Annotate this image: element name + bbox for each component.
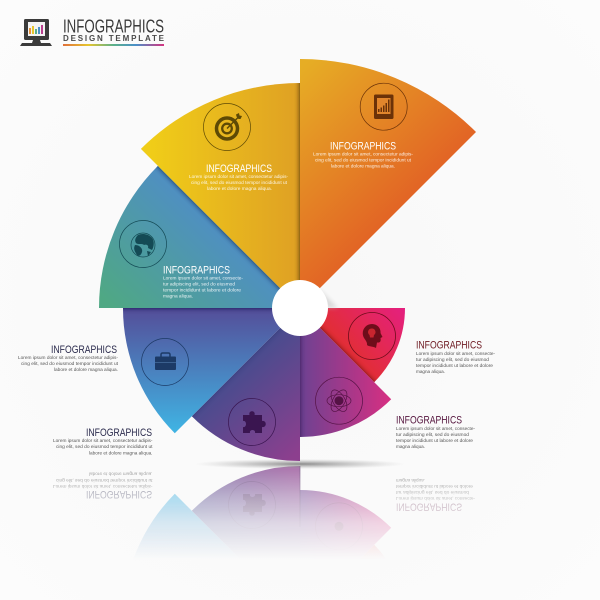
text block: teal: [163, 264, 243, 300]
subtitle: DESIGN TEMPLATE: [63, 34, 165, 43]
text block: red: magna aliqua.: [416, 369, 445, 375]
text block: blue: Lorem ipsum dolor sit amet, consectetur adipis-: [18, 355, 118, 361]
reflection: tur adipiscing elit, sed do eiusmod: [396, 489, 469, 495]
text block: violet: Lorem ipsum dolor sit amet, consectetur adipis-: [53, 438, 153, 444]
panel: orange tablet segment: [300, 59, 476, 308]
icon: tablet with bars: [360, 83, 407, 130]
reflection: tempor incididunt ut labore et dolore: [396, 483, 473, 489]
icon: atom: [316, 377, 362, 424]
icon: target: [204, 104, 250, 150]
icon: globe: [120, 220, 166, 268]
text block: magenta: Lorem ipsum dolor sit amet, consecte-: [396, 426, 475, 432]
text block: red: tur adipiscing elit, sed do eiusmod: [416, 357, 489, 363]
icon: head with lightbulb: [348, 312, 396, 360]
text block: orange: Lorem ipsum dolor sit amet, consectetur adipis-: [313, 152, 413, 158]
text block: blue: INFOGRAPHICS: [51, 344, 117, 356]
text block: magenta: [396, 414, 475, 450]
panel: blue briefcase segment: [18, 308, 280, 434]
icon: briefcase: [142, 338, 188, 386]
text block: teal: magna aliqua.: [163, 294, 193, 300]
text block: teal: INFOGRAPHICS: [163, 264, 230, 276]
text block: orange: [313, 140, 413, 170]
text block: magenta: magna aliqua.: [396, 444, 425, 450]
text block: violet: [53, 427, 153, 456]
text block: red: Lorem ipsum dolor sit amet, consecte-: [416, 351, 495, 357]
text block: red: tempor incididunt ut labore et dolore: [416, 363, 493, 369]
text block: red: [416, 340, 495, 375]
panel: yellow target segment: [141, 83, 300, 288]
text block: teal: Lorem ipsum dolor sit amet, consecte-: [163, 276, 243, 282]
text block: magenta: tur adipiscing elit, sed do eiusmod: [396, 432, 469, 438]
text block: yellow: INFOGRAPHICS: [206, 163, 272, 175]
text block: blue: cing elit, sed do eiusmod tempor incididunt ut: [21, 361, 119, 367]
text block: violet: cing elit, sed do eiusmod tempor incididunt ut: [56, 444, 153, 450]
text block: teal: tur adipiscing elit, sed do eiusmod: [163, 282, 235, 288]
text block: red: INFOGRAPHICS: [416, 340, 482, 352]
reflection: INFOGRAPHICS: [86, 488, 152, 500]
ground shadow: [195, 459, 405, 469]
reflection: cing elit, sed do eiusmod tempor incididunt ut: [56, 477, 153, 483]
rainbow rule: [63, 44, 164, 46]
text block: violet: INFOGRAPHICS: [86, 427, 152, 439]
text block: yellow: [189, 163, 288, 192]
text block: blue: [18, 344, 119, 373]
text block: yellow: cing elit, sed do eiusmod tempor incididunt ut: [191, 180, 288, 186]
text block: yellow: labore et dolore magna aliqua.: [207, 186, 272, 192]
reflection: Lorem ipsum dolor sit amet, consectetur adipis-: [53, 483, 153, 489]
text block: orange: INFOGRAPHICS: [330, 140, 396, 152]
text block: orange: labore et dolore magna aliqua.: [331, 164, 395, 170]
title: INFOGRAPHICS: [63, 16, 164, 36]
text block: yellow: Lorem ipsum dolor sit amet, consectetur adipis-: [189, 174, 288, 180]
reflection: labore et dolore magna aliqua.: [89, 471, 152, 477]
panel: violet puzzle segment: [53, 328, 300, 461]
panel: teal globe segment: [99, 166, 280, 308]
text block: teal: tempor incididunt ut labore et dolore: [163, 288, 241, 294]
panel: magenta atom segment: [300, 328, 475, 449]
reflection: INFOGRAPHICS: [396, 500, 462, 512]
text block: magenta: tempor incididunt ut labore et dolore: [396, 438, 473, 444]
reflection: magna aliqua.: [396, 477, 425, 483]
text block: orange: cing elit, sed do eiusmod tempor incididunt ut: [315, 158, 412, 164]
text block: magenta: INFOGRAPHICS: [396, 414, 462, 426]
header: [20, 16, 165, 46]
icon: computer monitor: [20, 19, 52, 46]
reflection: [53, 466, 475, 552]
text block: violet: labore et dolore magna aliqua.: [89, 450, 152, 456]
reflection: Lorem ipsum dolor sit amet, consecte-: [396, 495, 475, 501]
text block: blue: labore et dolore magna aliqua.: [54, 367, 118, 373]
hub circle: [272, 280, 338, 336]
panel: red head segment: [320, 308, 495, 382]
icon: puzzle piece: [228, 398, 276, 446]
